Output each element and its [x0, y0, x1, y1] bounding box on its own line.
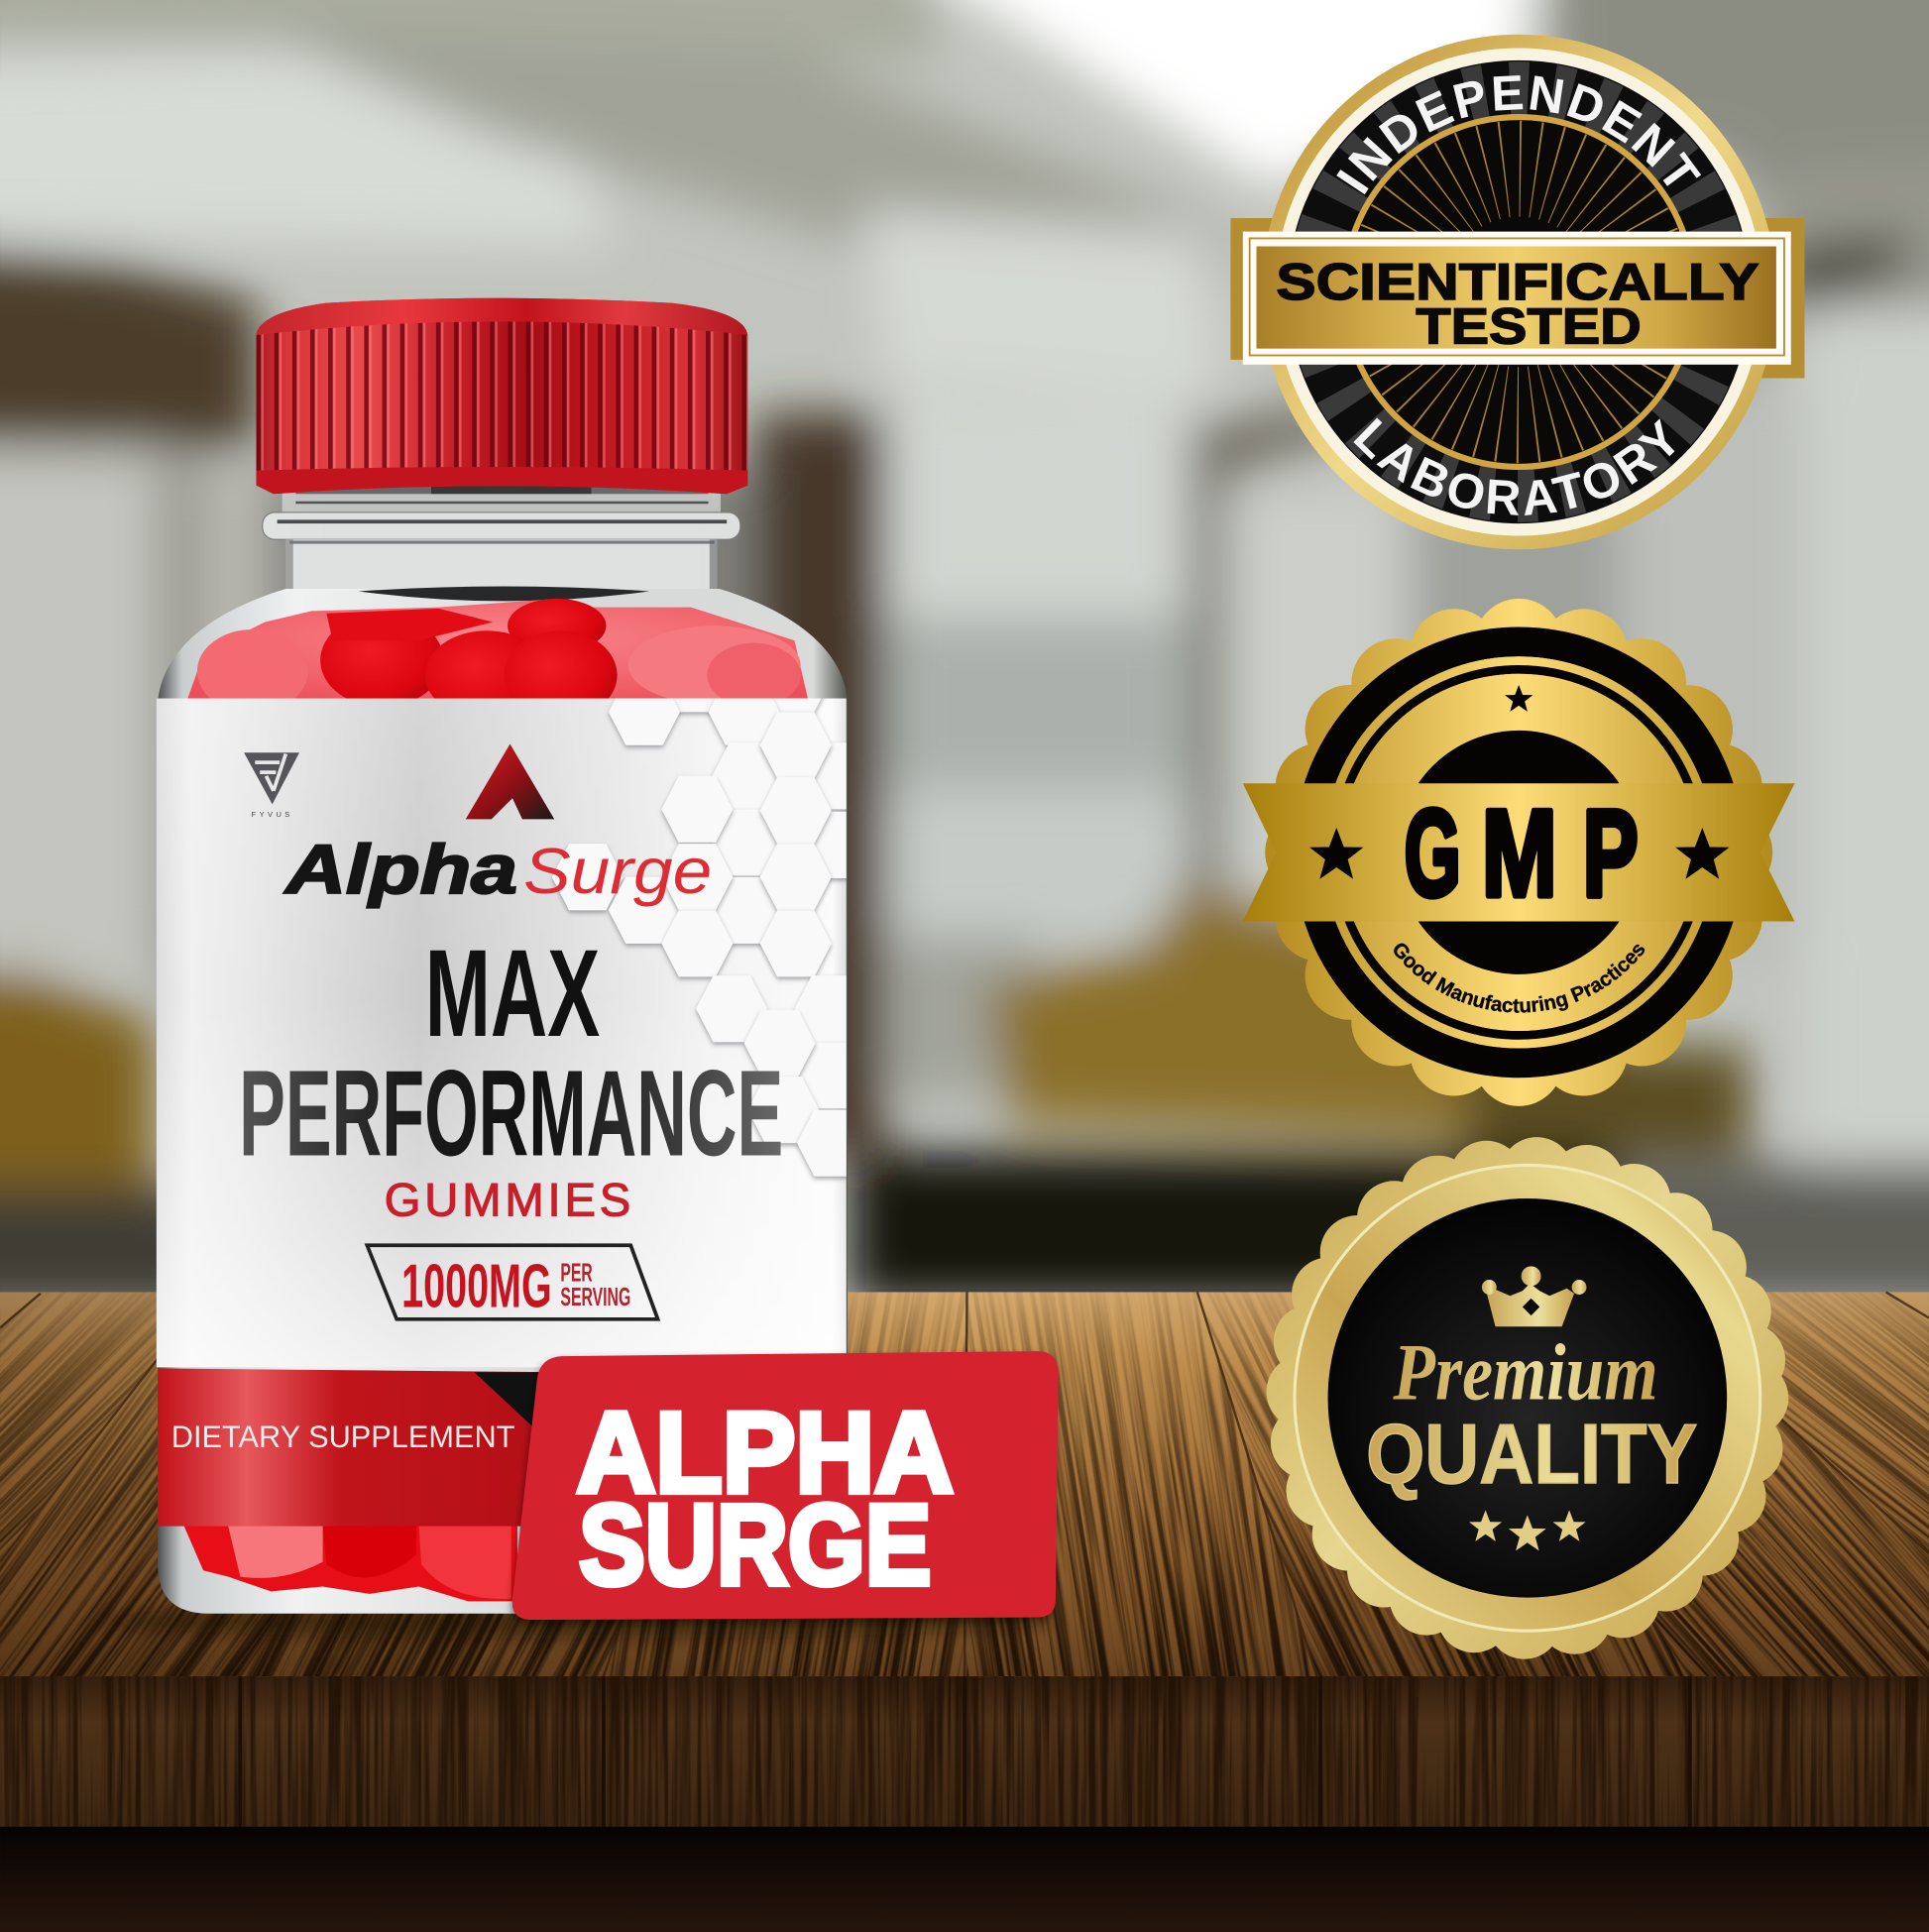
red label band	[158, 1369, 563, 1527]
three stars	[1469, 1510, 1586, 1550]
red label band: DIETARY SUPPLEMENT	[171, 1420, 514, 1454]
gold banner tabs	[1230, 218, 1804, 378]
star above ribbon	[1505, 685, 1532, 712]
table front edge	[0, 1676, 1929, 1827]
Alpha Surge logotype: Alpha	[284, 831, 517, 908]
ribbon	[1243, 783, 1795, 921]
black and gold rings	[1308, 641, 1730, 1063]
curved text: Good Manufacturing Practices: Good Manufacturing Practices	[1394, 944, 1645, 1013]
script text: Premium: Premium	[1393, 1327, 1658, 1418]
brand mark: FYVUS: FYVUS	[252, 810, 293, 819]
brand mark: FYVUS	[244, 752, 299, 819]
red gummies inside base of bottle	[183, 1525, 517, 1601]
curved text: INDEPENDENT: INDEPENDENT	[1336, 75, 1701, 194]
scalloped pale gold seal	[1285, 1156, 1770, 1641]
GMP lettering: G	[1405, 785, 1461, 922]
brand mark: Alpha triangle	[466, 744, 554, 819]
bottle cap	[257, 298, 747, 494]
badge: GMP good manufacturing practices	[1243, 599, 1794, 1106]
wooden table top	[0, 1292, 1929, 1677]
dosage box: 1000MG	[401, 1252, 552, 1320]
GMP lettering: P	[1583, 785, 1639, 922]
product bottle	[157, 298, 882, 1614]
heading: QUALITY: QUALITY	[1366, 1407, 1697, 1502]
wood grain overlay	[0, 1292, 1929, 1677]
bottle shadow on table	[98, 1604, 1060, 1639]
red Alpha Surge tag: SURGE	[579, 1481, 931, 1609]
badge: premium quality	[1285, 1156, 1770, 1641]
inner gold ring and sunburst	[1344, 117, 1694, 467]
gold title banner: SCIENTIFICALLY	[1276, 254, 1759, 311]
product label	[157, 698, 847, 1368]
badge: independent laboratory scientifically tested	[1230, 34, 1804, 549]
subheading: GUMMIES: GUMMIES	[385, 1174, 630, 1226]
dark floor strip	[0, 1827, 1929, 1932]
gold title banner: TESTED	[1416, 298, 1642, 355]
bottle glass neck	[263, 482, 740, 591]
scalloped gold seal	[1291, 625, 1747, 1080]
honeycomb hexagon pattern	[549, 698, 847, 1182]
red gummies inside top of bottle	[187, 599, 808, 699]
GMP lettering	[1405, 785, 1639, 922]
GMP lettering: M	[1482, 785, 1557, 922]
seal rings	[1261, 35, 1776, 549]
dosage box: SERVING	[560, 1282, 630, 1311]
bottle glass body	[158, 589, 848, 1614]
heading: PERFORMANCE: PERFORMANCE	[239, 1047, 783, 1183]
icon: crown	[1482, 1266, 1587, 1326]
gold title banner	[1243, 232, 1791, 365]
inner gold rings	[1295, 1165, 1760, 1631]
outer ring alternating sectors	[1315, 88, 1722, 496]
ribbon stars	[1309, 828, 1729, 879]
dosage box: PER	[560, 1257, 593, 1287]
Alpha Surge logotype	[284, 831, 712, 908]
heading: MAX: MAX	[425, 923, 600, 1063]
curved text: LABORATORY: LABORATORY	[1354, 418, 1675, 515]
blurred room background	[0, 0, 1929, 1311]
red Alpha Surge tag: ALPHA	[577, 1389, 954, 1517]
red Alpha Surge tag	[512, 1351, 1058, 1620]
Alpha Surge logotype: Surge	[523, 836, 712, 907]
glass neck shadow arc	[359, 586, 649, 601]
